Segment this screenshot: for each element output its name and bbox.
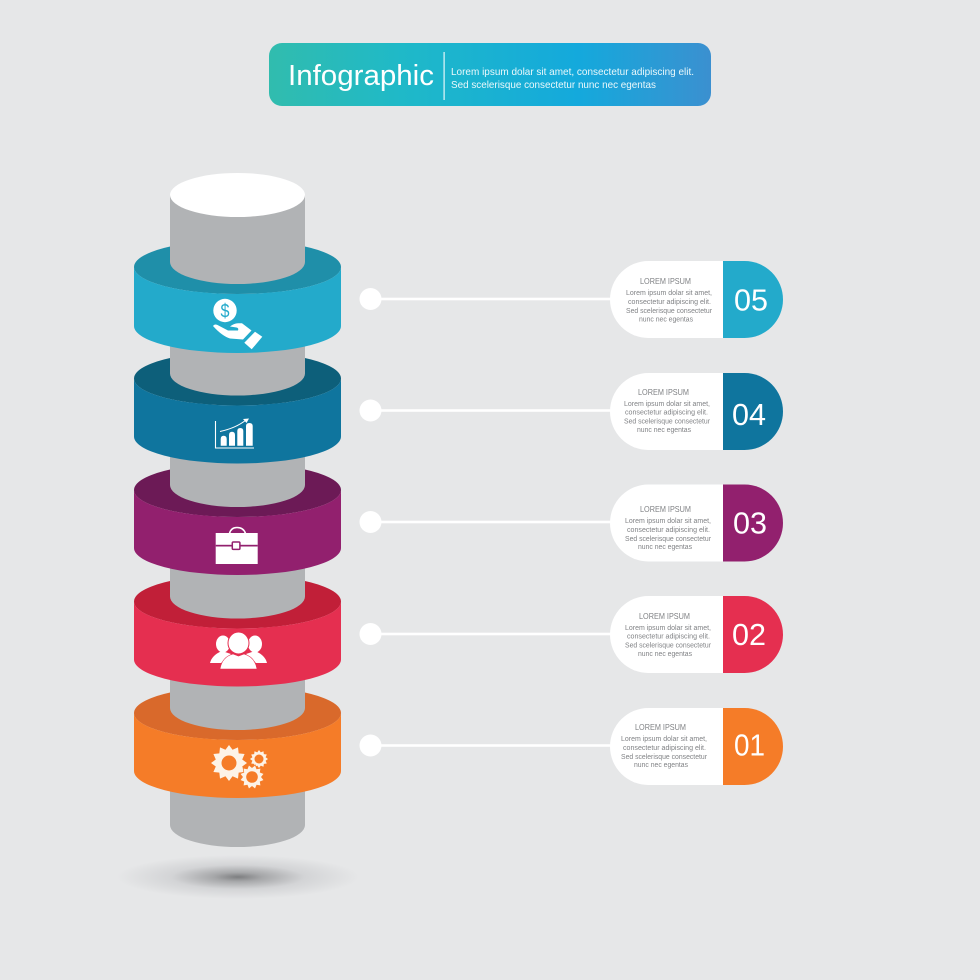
panel: step 05: consectetur adipiscing elit. bbox=[628, 297, 711, 306]
panel: step 04 bbox=[610, 373, 783, 450]
ring 02 red bbox=[134, 550, 341, 686]
header description bbox=[451, 66, 694, 91]
title: Infographic bbox=[288, 60, 434, 92]
panel: step 01: Sed scelerisque consectetur bbox=[621, 752, 707, 761]
panel: step 01: Lorem ipsum dolar sit amet, bbox=[621, 734, 707, 743]
panel: step 04: consectetur adipiscing elit. bbox=[625, 408, 708, 416]
panel: step 02: Lorem ipsum dolar sit amet, bbox=[625, 623, 711, 632]
ring 04 dark blue bbox=[134, 330, 341, 463]
panel: step 01: consectetur adipiscing elit. bbox=[623, 743, 706, 752]
header description: Lorem ipsum dolar sit amet, consectetur adipiscing elit. bbox=[451, 66, 694, 78]
panel: step 02 bbox=[610, 596, 783, 673]
panel: step 02: LOREM IPSUM bbox=[639, 612, 690, 621]
panel: step 04: nunc nec egentas bbox=[637, 425, 691, 434]
cylinder stack bbox=[134, 173, 341, 847]
panel: step 03: consectetur adipiscing elit. bbox=[627, 525, 710, 534]
panel: step 01: nunc nec egentas bbox=[634, 760, 688, 769]
panel: step 01: 01 bbox=[734, 728, 765, 762]
panel: step 04: Sed scelerisque consectetur bbox=[624, 416, 710, 426]
connector 05 bbox=[360, 288, 615, 310]
panel: step 05: nunc nec egentas bbox=[639, 314, 693, 324]
connector 03 bbox=[360, 511, 615, 533]
pole base bbox=[170, 770, 305, 847]
icon: people group bbox=[210, 632, 267, 669]
header description: Sed scelerisque consectetur nunc nec egentas bbox=[451, 79, 656, 91]
panel: step 05: 05 bbox=[734, 282, 768, 318]
ring 01 orange bbox=[134, 660, 341, 798]
icon: hand holding coin bbox=[213, 299, 262, 349]
panel: step 03: 03 bbox=[733, 506, 767, 540]
panel: step 05: Lorem ipsum dolar sit amet, bbox=[626, 288, 712, 297]
connector 04 bbox=[360, 400, 615, 422]
ground shadow bbox=[117, 855, 359, 899]
panel: step 02: 02 bbox=[732, 617, 766, 652]
header banner bbox=[269, 43, 711, 106]
ring 03 purple bbox=[134, 440, 341, 575]
connector 01 bbox=[360, 734, 615, 756]
icon: gears bbox=[211, 745, 268, 792]
panel: step 02: consectetur adipiscing elit. bbox=[627, 632, 710, 640]
cylinder white top bbox=[170, 173, 305, 217]
panel: step 05 bbox=[610, 261, 783, 338]
panel: step 04: 04 bbox=[732, 397, 766, 432]
icon: briefcase bbox=[216, 528, 258, 564]
panel: step 03: Lorem ipsum dolar sit amet, bbox=[625, 516, 711, 525]
icon: growth chart bbox=[216, 418, 254, 448]
panel: step 04: LOREM IPSUM bbox=[638, 388, 689, 397]
panel: step 03 bbox=[610, 484, 783, 562]
panel: step 03: nunc nec egentas bbox=[638, 542, 692, 551]
panel: step 01: LOREM IPSUM bbox=[635, 723, 686, 732]
panel: step 03: LOREM IPSUM bbox=[640, 505, 691, 514]
connector 02 bbox=[360, 623, 615, 645]
panel: step 01 bbox=[610, 708, 783, 785]
panel: step 04: Lorem ipsum dolar sit amet, bbox=[624, 399, 710, 408]
panel: step 03: Sed scelerisque consectetur bbox=[625, 534, 711, 543]
panel: step 02: Sed scelerisque consectetur bbox=[625, 640, 711, 650]
panel: step 05: LOREM IPSUM bbox=[640, 277, 691, 286]
panel: step 05: Sed scelerisque consectetur bbox=[626, 306, 712, 315]
icon: hand holding coin: $ bbox=[220, 302, 230, 322]
ring 05 light blue bbox=[134, 195, 341, 353]
panel: step 02: nunc nec egentas bbox=[638, 649, 692, 658]
